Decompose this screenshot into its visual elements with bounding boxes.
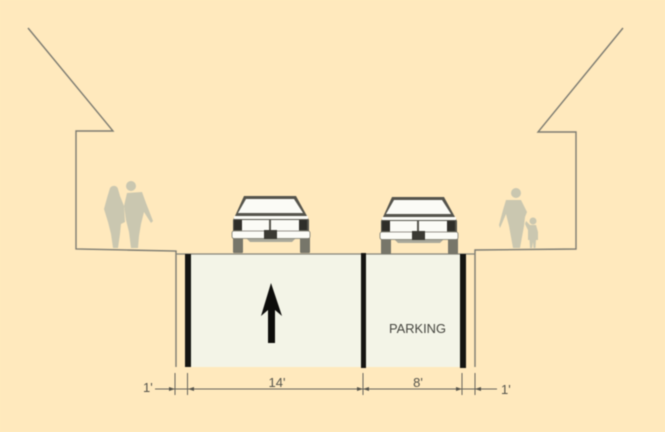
pedestrians: adult and child	[499, 188, 538, 248]
direction arrow	[261, 283, 282, 343]
car in travel lane	[232, 196, 310, 253]
dimension label: 8 feet: 8'	[413, 375, 423, 390]
lane stripes	[185, 253, 466, 368]
parked car	[380, 197, 458, 254]
pedestrians: walking couple	[104, 181, 153, 248]
dimension label: 14 feet: 14'	[269, 375, 285, 390]
right building outline and sidewalk	[475, 28, 623, 367]
dimension label: right 1 foot: 1'	[501, 382, 511, 397]
parking label: PARKING	[389, 321, 446, 336]
road surface	[176, 254, 475, 367]
dimension label: left 1 foot: 1'	[143, 380, 153, 395]
left building outline and sidewalk	[28, 28, 176, 367]
dimension arrowheads	[169, 387, 481, 391]
dimension line	[155, 373, 497, 395]
